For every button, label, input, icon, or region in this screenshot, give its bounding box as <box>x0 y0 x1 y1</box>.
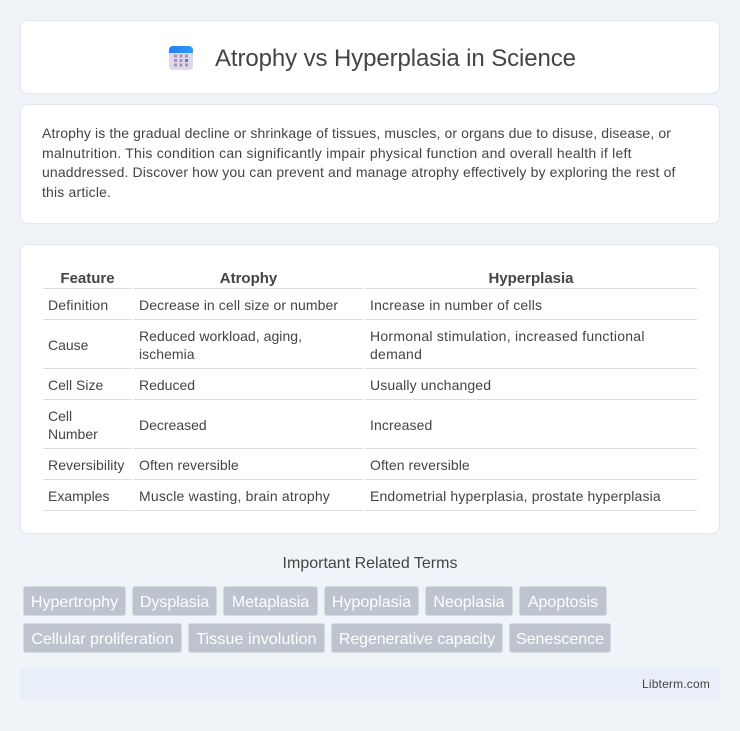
tag row 2: Cellular proliferation <box>31 631 174 648</box>
row: cell number: Increased <box>370 417 432 433</box>
table header: Atrophy <box>220 270 277 287</box>
related terms heading: Important Related Terms <box>283 555 457 572</box>
panel: title header <box>20 20 720 94</box>
row: cell number: Decreased <box>139 417 207 433</box>
row: examples: Examples <box>48 488 109 504</box>
row: cause <box>48 328 645 362</box>
row: cell size <box>48 377 491 393</box>
tag row 1 <box>23 586 607 616</box>
tag row 1: Hypoplasia <box>332 594 411 611</box>
row: cell size: Usually unchanged <box>370 377 491 393</box>
intro paragraph: unaddressed. Discover how you can prevent and manage atrophy effectively by exploring the rest of <box>42 164 676 180</box>
table header: Feature <box>60 270 115 287</box>
row: examples <box>48 488 661 504</box>
tag row 1: Dysplasia <box>140 594 209 611</box>
panel: introduction <box>20 104 720 224</box>
row: definition: Definition <box>48 297 108 313</box>
row: examples: Endometrial hyperplasia, prostate hyperplasia <box>370 488 661 504</box>
row: cause: ischemia <box>139 346 195 362</box>
row: cause: demand <box>370 346 422 362</box>
row: definition <box>48 297 542 313</box>
footer brand: Libterm.com <box>642 677 710 691</box>
table header <box>60 270 574 287</box>
row: definition: Increase in number of cells <box>370 297 542 313</box>
intro paragraph: Atrophy is the gradual decline or shrinkage of tissues, muscles, or organs due to disuse, disease, or <box>42 125 671 141</box>
tag row 2 <box>23 623 611 653</box>
intro paragraph <box>42 125 676 200</box>
row: cell number: Cell <box>48 408 72 424</box>
row: reversibility: Often reversible <box>370 457 470 473</box>
row: cell size: Reduced <box>139 377 195 393</box>
row: reversibility: Often reversible <box>139 457 239 473</box>
tag row 2: Regenerative capacity <box>339 631 495 648</box>
tag row 1: Apoptosis <box>528 594 598 611</box>
row: cell number <box>48 408 432 442</box>
row: cause: Hormonal stimulation, increased functional <box>370 328 645 344</box>
row: cell size: Cell Size <box>48 377 103 393</box>
row: cause: Cause <box>48 337 88 353</box>
related terms tags <box>23 586 611 653</box>
table header: Hyperplasia <box>488 270 574 287</box>
icon: calendar <box>169 46 193 70</box>
row: cause: Reduced workload, aging, <box>139 328 302 344</box>
comparison table <box>43 270 697 511</box>
panel: comparison table <box>20 244 720 534</box>
row: examples: Muscle wasting, brain atrophy <box>139 488 330 504</box>
intro paragraph: malnutrition. This condition can significantly impair physical function and overall health if left <box>42 145 632 161</box>
row: definition: Decrease in cell size or number <box>139 297 338 313</box>
row: reversibility: Reversibility <box>48 457 125 473</box>
title: Atrophy vs Hyperplasia in Science <box>215 45 576 72</box>
intro paragraph: this article. <box>42 184 111 200</box>
footer <box>20 667 720 701</box>
tag row 1: Hypertrophy <box>31 594 118 611</box>
tag row 2: Senescence <box>516 631 604 648</box>
tag row 2: Tissue involution <box>196 631 317 648</box>
tag row 1: Metaplasia <box>232 594 309 611</box>
row: reversibility <box>48 457 470 473</box>
row: cell number: Number <box>48 426 98 442</box>
tag row 1: Neoplasia <box>433 594 505 611</box>
